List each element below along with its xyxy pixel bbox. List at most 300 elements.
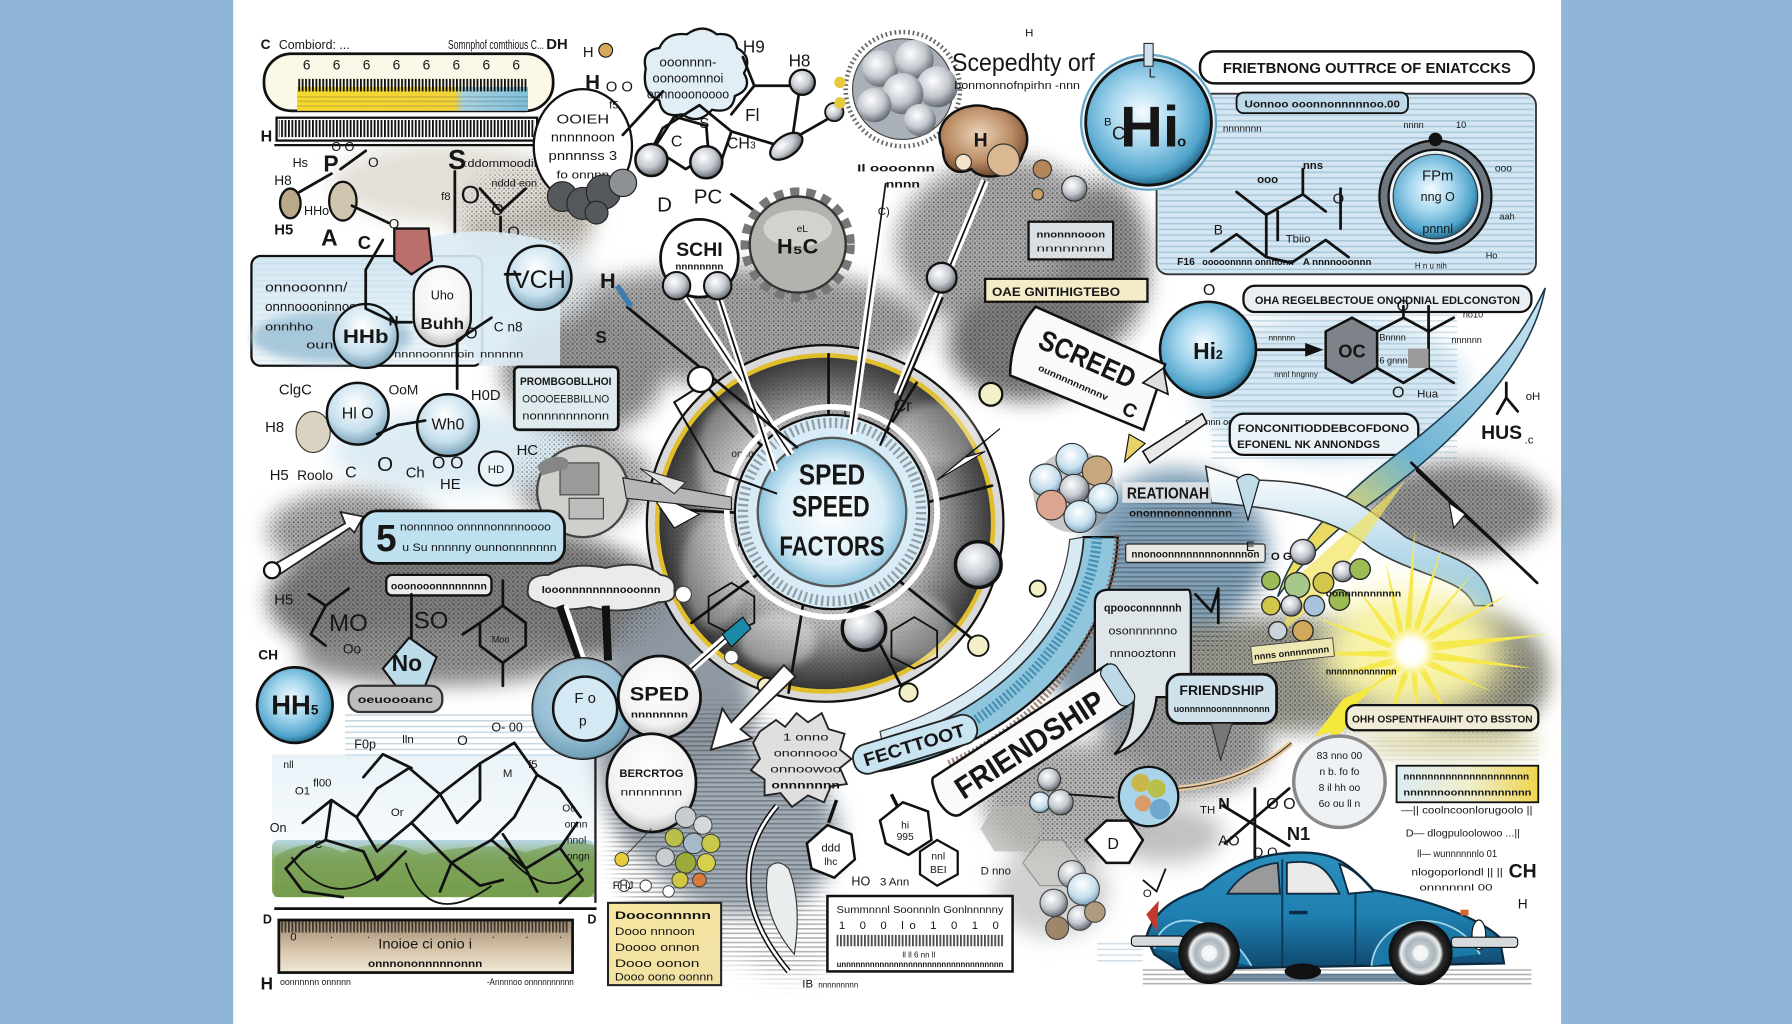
pill: friendship small: FRIENDSHIP	[1179, 683, 1264, 698]
panel: left blue info: C n8	[494, 319, 523, 334]
big blue sphere H: B	[1104, 117, 1112, 129]
hub heading: sped: SPED	[799, 460, 865, 492]
molecule: top centre hexagon network: PC	[694, 185, 722, 208]
bubble: upper left: nnnnnoon	[551, 131, 615, 145]
panel: top-left gauge tube: Somnphof comthious C...	[448, 38, 544, 52]
header pill: right: FRIETBNONG OUTTRCE OF ENIATCCKS	[1223, 61, 1511, 77]
scribbled notes: right of car: nlogoporlondl || ||	[1411, 867, 1503, 878]
scribbled notes: right of car	[1401, 806, 1537, 912]
gauge: lens and yellow bar: 8 il hh oo	[1319, 783, 1361, 794]
hexagons: 3 Ann	[880, 877, 909, 889]
brown blob atom	[939, 106, 1087, 201]
ribbon: FECTTOOT: FECTTOOT	[861, 720, 967, 770]
formula: N O cross: N	[1218, 796, 1230, 813]
boxed note: left centre: nonnnnnnnonn	[522, 410, 609, 422]
gauge: lens and yellow bar: nnnnnnnnnnnnnnnnnnnnn	[1403, 771, 1530, 781]
panel: right blue analysis: nnnnnnn	[1223, 123, 1262, 133]
molecule: mid right: O	[1392, 385, 1404, 402]
molecule: top-left: nddd eon	[491, 178, 537, 189]
panel: top-left gauge tube: C	[261, 37, 271, 52]
label: grey note: nnonnnooon	[1037, 230, 1106, 240]
molecule: top centre hexagon network: H9	[743, 37, 765, 57]
ring gauge: right: pnnnl	[1422, 222, 1453, 236]
speech box: nnnooztonn	[1110, 648, 1176, 660]
big blue sphere H	[1081, 43, 1216, 190]
molecule: mid right	[1160, 282, 1483, 427]
molecule: top centre hexagon network: CH3	[727, 136, 756, 153]
molecule: top-left	[274, 140, 538, 242]
hexagons: HO	[851, 875, 871, 889]
gear: H₅C	[777, 234, 819, 259]
ribbon label: Screed: ounnnnnnnnnv	[1037, 363, 1111, 403]
left spheres molecule: OoM	[389, 382, 418, 397]
pill: long right: OHH OSPENTHFAUIHT OTO BSSTON	[1352, 714, 1533, 725]
labels: burst: nnnnnnonnnnnn	[1326, 666, 1397, 676]
sphere: F	[533, 658, 633, 759]
molecule: top-left: O	[461, 181, 480, 209]
ribbon: blue and gold blade	[1278, 288, 1545, 597]
bubble: SPED	[618, 656, 701, 738]
central dial	[647, 345, 1003, 702]
connector: SPED to dial	[691, 617, 751, 669]
central dial: onnonnn	[731, 449, 771, 460]
panel: left blue info: VCH	[513, 266, 566, 294]
ruler: bottom middle: 1 0 0 lo 1 0 1 0	[839, 920, 999, 932]
ruler: bottom-left: D	[263, 912, 272, 926]
cloud callout: top: oonoomnnoi	[653, 71, 723, 85]
spokes and pins: H	[600, 268, 616, 293]
formula: N O cross: TH	[1200, 805, 1215, 817]
small callout near spokes: C)	[878, 206, 890, 218]
ribbon label: Screed: C	[1119, 398, 1140, 424]
formula: far right: HUS	[1481, 422, 1522, 444]
note: yellow: Dooo oonon	[615, 958, 699, 970]
molecule: mid right: Hua	[1417, 389, 1439, 401]
molecule: mid right: Hi2	[1193, 338, 1223, 364]
cloud callout: top: ooonnnn-	[659, 55, 717, 69]
label: grey note	[1029, 222, 1113, 259]
panel: right blue analysis: Uonnoo ooonnonnnnnoo.00	[1245, 99, 1400, 110]
bubble: upper left: fo onnnn	[557, 169, 609, 181]
bubble: SCHI	[661, 219, 738, 299]
formula: N O cross: AO	[1218, 834, 1240, 850]
ruler: bottom middle: nnnnnnnnn	[818, 980, 858, 989]
tube: blue curved	[1206, 463, 1537, 606]
molecule: top centre hexagon network: Fl	[745, 105, 759, 125]
molecule: top centre hexagon network: H8	[789, 50, 810, 70]
spokes and pins: S	[595, 327, 607, 347]
road	[1097, 939, 1531, 985]
scribbled notes: right of car: H	[1518, 897, 1528, 912]
small top labels near tube: H	[585, 71, 600, 94]
bubble: lower	[607, 734, 696, 832]
molecule: top-left: O	[491, 202, 504, 219]
small callout near spokes	[857, 163, 935, 218]
ring gauge: right: 10	[1456, 120, 1466, 130]
panel: left blue info: O	[465, 325, 478, 342]
left spheres molecule: H8	[265, 420, 284, 436]
formula: MO SO: CH	[258, 647, 278, 662]
heading block: relationship: E	[1246, 539, 1255, 554]
molecule: top-left: O O	[331, 140, 355, 154]
panel: right blue analysis: ooo	[1257, 174, 1278, 186]
formula: MO SO: SO	[414, 608, 448, 635]
ring gauge: right: nng O	[1421, 190, 1455, 204]
ribbon: FRIENDSHIP	[926, 661, 1138, 821]
pins under cloud	[560, 586, 738, 664]
panel: bottom-left molecule landscape: lln	[402, 734, 414, 746]
formula: N O cross: O O	[1253, 845, 1278, 860]
title: specificity: bonmonnofnpirhn -nnn	[954, 80, 1080, 92]
title: specificity	[952, 28, 1096, 92]
heading block: relationship: nnonoonnnnnnnnonnnnon	[1131, 550, 1259, 561]
small callout near spokes: nnnn	[886, 179, 920, 190]
cloud label: Iooonnnnnnnnooonnn	[542, 585, 661, 596]
panel: right blue analysis: O	[1333, 191, 1344, 207]
pill: sub label: ooonooonnnnnnnn	[391, 582, 487, 593]
molecule: top-left: O	[368, 155, 379, 170]
panel: top-left gauge tube	[261, 37, 568, 111]
speech box: osonnnnnno	[1109, 625, 1177, 637]
dark cluster under bubble	[547, 169, 637, 224]
ring gauge: right: Ho	[1486, 250, 1497, 260]
molecule: top-left: H5	[274, 222, 293, 238]
panel: top-left gauge tube: Combiord: ...	[279, 38, 350, 52]
note: yellow: Dooo oono oonnn	[615, 972, 713, 984]
panel: bottom-left molecule landscape: C	[314, 839, 323, 851]
left spheres molecule: Ch	[406, 466, 425, 482]
spiky label	[751, 713, 851, 807]
left spheres molecule: Hl O	[342, 405, 374, 422]
molecule: network lower middle: D	[1107, 836, 1119, 853]
panel: top-left gauge tube: 6 6 6 6 6 6 6 6	[303, 58, 520, 73]
ruler: bottom-left: D	[587, 912, 597, 926]
molecule: top centre hexagon network	[623, 37, 843, 223]
panel: bottom-left molecule landscape: nnol	[567, 835, 586, 846]
boxed note: left centre	[514, 367, 618, 430]
panel: left blue info: nnnnoonnnoin	[394, 350, 475, 361]
ring gauge: right: H n u nih	[1415, 262, 1447, 271]
molecule: top centre hexagon network: S	[699, 116, 709, 132]
pill: mid right: OHA REGELBECTOUE ONOIDNIAL EDLCONGTON	[1255, 295, 1520, 307]
pill: mid right	[1243, 286, 1531, 312]
ruler: bottom-left: H	[261, 974, 273, 994]
molecule: mid right: O	[1397, 298, 1409, 315]
molecule: top-left: S	[448, 144, 466, 175]
ribbon: FRIENDSHIP: FRIENDSHIP	[948, 683, 1111, 806]
panel: bottom-left molecule landscape: On	[270, 821, 286, 835]
ruler: bottom middle: unnnnnnnnnnnnnnnnnnnnnnnnnnnnnnnnnn	[837, 960, 1004, 969]
left spheres molecule: HD	[488, 464, 504, 476]
gauge: lens and yellow bar: 6o ou ll n	[1319, 799, 1361, 810]
car	[1097, 853, 1531, 985]
panel: bottom-left molecule landscape: O	[457, 733, 468, 748]
formula: MO SO	[258, 581, 526, 691]
pill: long right	[1346, 705, 1538, 730]
molecule: mid right: nnnnnnn oo	[1185, 417, 1233, 427]
left spheres molecule: H0D	[471, 388, 501, 404]
formula: far right: .c	[1525, 434, 1534, 446]
shaded clouds backdrop	[252, 142, 1562, 988]
labels: burst	[1251, 589, 1402, 676]
bubble: upper left: pnnnnss 3	[549, 149, 617, 163]
left spheres molecule: Wh0	[432, 417, 465, 434]
scribbled notes: right of car: —|| coolncoonlorugoolo ||	[1401, 806, 1533, 817]
scribbled notes: right of car: CH	[1509, 861, 1537, 883]
boxed note: left centre: OOOOEEBBILLNO	[522, 393, 609, 405]
spiky label: ononnooo	[774, 749, 838, 760]
left spheres molecule: Roolo	[297, 468, 333, 483]
panel: top-left gauge tube: DH	[546, 37, 568, 53]
big blue sphere H: C	[1112, 122, 1125, 143]
bubble: lower: BERCRTOG	[619, 768, 684, 780]
cloud callout: top: onnnooonoooo	[647, 87, 729, 101]
molecule: top-left: Hs	[293, 156, 308, 170]
panel: left blue info: onnhho	[265, 321, 313, 333]
machine lens	[517, 443, 731, 537]
scribbled notes: right of car: D— dlogpuloolowoo ...||	[1406, 829, 1520, 840]
panel: left blue info: HHb	[343, 326, 389, 348]
pill: explanation right: EFONENL NK ANNONDGS	[1237, 439, 1380, 451]
molecule: network lower middle	[981, 768, 1166, 939]
formula: MO SO: No	[392, 650, 422, 676]
hub heading: factors: FACTORS	[779, 530, 885, 561]
big blue sphere H: o	[1177, 134, 1186, 150]
label: cream tag: OAE GNITIHIGTEBO	[992, 285, 1120, 299]
panel: left blue info: A	[321, 225, 338, 251]
panel: bottom-left molecule landscape	[270, 711, 597, 909]
pill: 5	[361, 511, 565, 563]
heading block: relationship: ononnnonnonnnnn	[1129, 509, 1232, 520]
heading block: relationship: REATIONAH	[1127, 485, 1209, 502]
big blue sphere H: Hi	[1120, 95, 1179, 159]
panel: left blue info	[251, 225, 571, 389]
formula: far right: oH	[1526, 391, 1540, 403]
left spheres molecule: C	[345, 465, 357, 482]
ruler: bottom middle: ll ll 6 nn ll	[902, 951, 936, 960]
ribbon label: Screed: SCREED	[1034, 324, 1141, 395]
starburst	[1280, 480, 1549, 763]
screed label arrow	[1125, 414, 1207, 463]
panel: right blue analysis: B	[1214, 222, 1223, 237]
small top labels near tube	[583, 43, 633, 112]
panel: left blue info: C	[358, 232, 371, 253]
ruler: bottom middle	[802, 896, 1013, 990]
molecule: mid right: Bnnnn	[1379, 333, 1406, 343]
ring gauge: right: aah	[1499, 211, 1515, 221]
left spheres molecule: HE	[440, 477, 461, 493]
ring gauge: right: FPm	[1422, 169, 1453, 185]
panel: bottom-left molecule landscape: F0p	[354, 738, 376, 752]
panel: left blue info: onnooonnn/	[265, 280, 348, 294]
molecule: mid right: OC	[1338, 341, 1366, 362]
boxed note: left centre: PROMBGOBLLHOI	[520, 376, 611, 388]
central dial: C	[843, 405, 854, 421]
molecule: mid right: nnnl hngnny	[1274, 370, 1318, 379]
pill: sub label	[386, 575, 491, 595]
label under cluster: FHJ	[613, 880, 633, 892]
panel: left blue info: ounil	[306, 340, 341, 352]
panel: bottom-left molecule landscape: fl00	[313, 777, 332, 789]
speech box: qpooconnnnnh	[1104, 602, 1182, 614]
hub heading: speed: SPEED	[792, 491, 870, 524]
molecule: top centre hexagon network: D	[657, 193, 672, 216]
ring gauge: right: ooo	[1495, 163, 1512, 174]
pill: friendship small	[1167, 674, 1277, 760]
bubble: SCHI: nnnnnnnn	[675, 262, 724, 272]
label: cream tag	[985, 279, 1147, 302]
pill: friendship small: uonnnnnoonnnnnonnn	[1174, 704, 1270, 714]
molecule: mid right: 6 gnnn	[1379, 355, 1407, 365]
panel: bottom-left molecule landscape: O- 00	[491, 720, 523, 734]
panel: bottom-left molecule landscape: M	[503, 768, 512, 780]
note: yellow: Dooconnnnn	[615, 910, 711, 922]
hexagons: lhc	[824, 857, 837, 868]
cluster: lower	[615, 807, 720, 897]
infographic canvas	[233, 0, 1562, 1024]
spiky label: onnnnnnn	[771, 781, 840, 792]
pill: 5: nonnnnoo onnnnonnnnoooo	[400, 521, 551, 533]
panel: right blue analysis: Tbiio	[1286, 233, 1310, 245]
small callout near spokes: Il oooonnn	[857, 163, 935, 174]
molecule: mid right: nnnnnn	[1451, 335, 1482, 345]
spiky label: onnoowoo	[770, 765, 842, 776]
scribbled notes: right of car: onnnnnnl 00	[1419, 882, 1493, 892]
cord and blue sphere	[1119, 743, 1291, 826]
dial hub: speed factors	[727, 407, 937, 617]
molecule: top-left: H8	[274, 173, 292, 188]
ring gauge: right: nnnn	[1403, 120, 1424, 130]
formula: MO SO: H5	[274, 593, 293, 609]
gauge: lens and yellow bar	[1294, 736, 1538, 827]
molecule: top-left: O	[389, 217, 399, 232]
header pill: right	[1200, 51, 1534, 83]
bubble: SCHI: SCHI	[676, 239, 723, 261]
molecule: top centre hexagon network: C	[671, 133, 682, 150]
title: specificity: Scepedhty orf	[952, 49, 1096, 77]
formula: N O cross	[1200, 789, 1310, 860]
left spheres molecule: O	[377, 453, 393, 476]
white page	[233, 0, 1561, 1024]
title: specificity: H	[1025, 28, 1033, 40]
arrow: white down-left	[711, 665, 795, 750]
panel: right blue analysis: ooooonnnn onnnonn	[1202, 257, 1294, 267]
molecule: top-left: :ddommoodif	[464, 158, 538, 170]
note: yellow: Doooo onnon	[615, 942, 699, 954]
gauge: lens and yellow bar: n b. fo fo	[1319, 767, 1360, 778]
hexagons: BEI	[930, 865, 947, 876]
spokes and pins	[595, 181, 1046, 702]
formula: MO SO: Moo	[492, 634, 509, 644]
hexagons: nnl	[931, 851, 945, 862]
sphere: HH: HH5	[271, 689, 319, 720]
sphere: HH	[257, 667, 333, 743]
hexagons: D nno	[981, 865, 1011, 877]
pill: 5: 5	[376, 517, 397, 559]
ruler: bottom-left: 0 · ·	[290, 932, 370, 944]
ruler: bottom middle: IB	[802, 978, 813, 990]
molecule: top-left: f8	[441, 191, 451, 203]
panel: left blue info: Uho	[431, 288, 454, 302]
ribbon label: Screed	[1002, 305, 1171, 434]
panel: left blue info: Buhh	[421, 316, 464, 333]
panel: right blue analysis: nns	[1303, 160, 1323, 172]
heading block: relationship: O G	[1271, 551, 1292, 563]
left spheres molecule: O O	[432, 453, 463, 473]
ruler: bottom-left: onnnononnnnnonnn	[368, 959, 482, 970]
heading block: relationship	[1122, 474, 1292, 563]
dial band	[869, 535, 1118, 773]
pill: explanation right	[1230, 414, 1418, 455]
molecule: top-left: P	[323, 150, 339, 176]
molecule cluster: green	[1262, 539, 1370, 641]
pill: 5: u Su nnnnny ounnonnnnnnn	[402, 542, 557, 554]
ribbon: FECTTOOT	[850, 711, 981, 777]
molecule: top-left: O	[507, 225, 520, 242]
arrow: left to 5 pill	[264, 512, 363, 578]
panel: left blue info: onnnoooninnoo	[265, 300, 357, 314]
pill: explanation right: FONCONITIODDEBCOFDONO	[1238, 423, 1409, 435]
panel: bottom-left molecule landscape: Oo	[562, 803, 576, 814]
cloud label	[528, 565, 675, 611]
hexagons: ddd	[821, 842, 840, 854]
gear	[745, 192, 850, 297]
small top labels near tube: O O	[606, 79, 633, 95]
ruler: bottom-left	[261, 912, 597, 994]
bubble: upper left: OOIEH	[557, 112, 609, 126]
gear: eL	[797, 224, 808, 235]
speech box	[1095, 589, 1218, 754]
panel: right blue analysis: A nnnnooonnn	[1303, 257, 1372, 267]
gauge: lens and yellow bar: 83 nno 00	[1317, 751, 1363, 762]
note: yellow	[608, 903, 721, 985]
left spheres molecule	[265, 382, 513, 493]
left spheres molecule: H5	[270, 468, 289, 484]
ruler: bottom-left: oonnnnnn onnnnn	[280, 977, 351, 987]
field: beige hatch	[1349, 737, 1538, 762]
pill: grey label	[349, 686, 442, 712]
bubble: lower: nnnnnnnn	[621, 787, 683, 798]
panel: right blue analysis	[1157, 93, 1536, 274]
pointer from Screed to sphere	[1143, 368, 1168, 394]
sphere cluster: top centre	[834, 32, 960, 146]
formula: N O cross: N1	[1287, 823, 1310, 844]
pill: grey label: oeuoooanc	[358, 695, 434, 706]
scribbled notes: right of car: ll— wunnnnnnlo 01	[1417, 849, 1497, 860]
sphere: F: p	[579, 714, 587, 729]
small top labels near tube: f5	[609, 100, 619, 112]
panel: left blue info: H	[389, 314, 398, 329]
bubble: upper left	[534, 89, 632, 203]
panel: right blue analysis: F16	[1177, 257, 1195, 268]
hexagons	[807, 802, 1011, 889]
panel: bottom-left molecule landscape: f5	[528, 759, 538, 771]
formula: N O cross: O O	[1266, 796, 1296, 813]
hexagons: hi	[901, 821, 909, 832]
label: grey note: nnnnnnnn	[1037, 243, 1105, 253]
panel: bottom-left molecule landscape: nll	[283, 760, 294, 771]
molecule: mid right: no10	[1463, 310, 1483, 320]
ruler: bottom-left: · · ·	[491, 932, 562, 944]
hexagons: 995	[897, 832, 914, 843]
central dial: Cr	[894, 395, 912, 415]
molecule: mid right: O	[1203, 282, 1215, 299]
bubble: SPED: nnnnnnnn	[631, 710, 689, 720]
ruler: bottom-left: -Annnnoo onnnnnnnnnn	[487, 977, 574, 987]
curved leaf bracket	[749, 794, 903, 971]
right blue hatch field	[1211, 314, 1457, 463]
molecule cluster: centre right	[1030, 443, 1118, 533]
